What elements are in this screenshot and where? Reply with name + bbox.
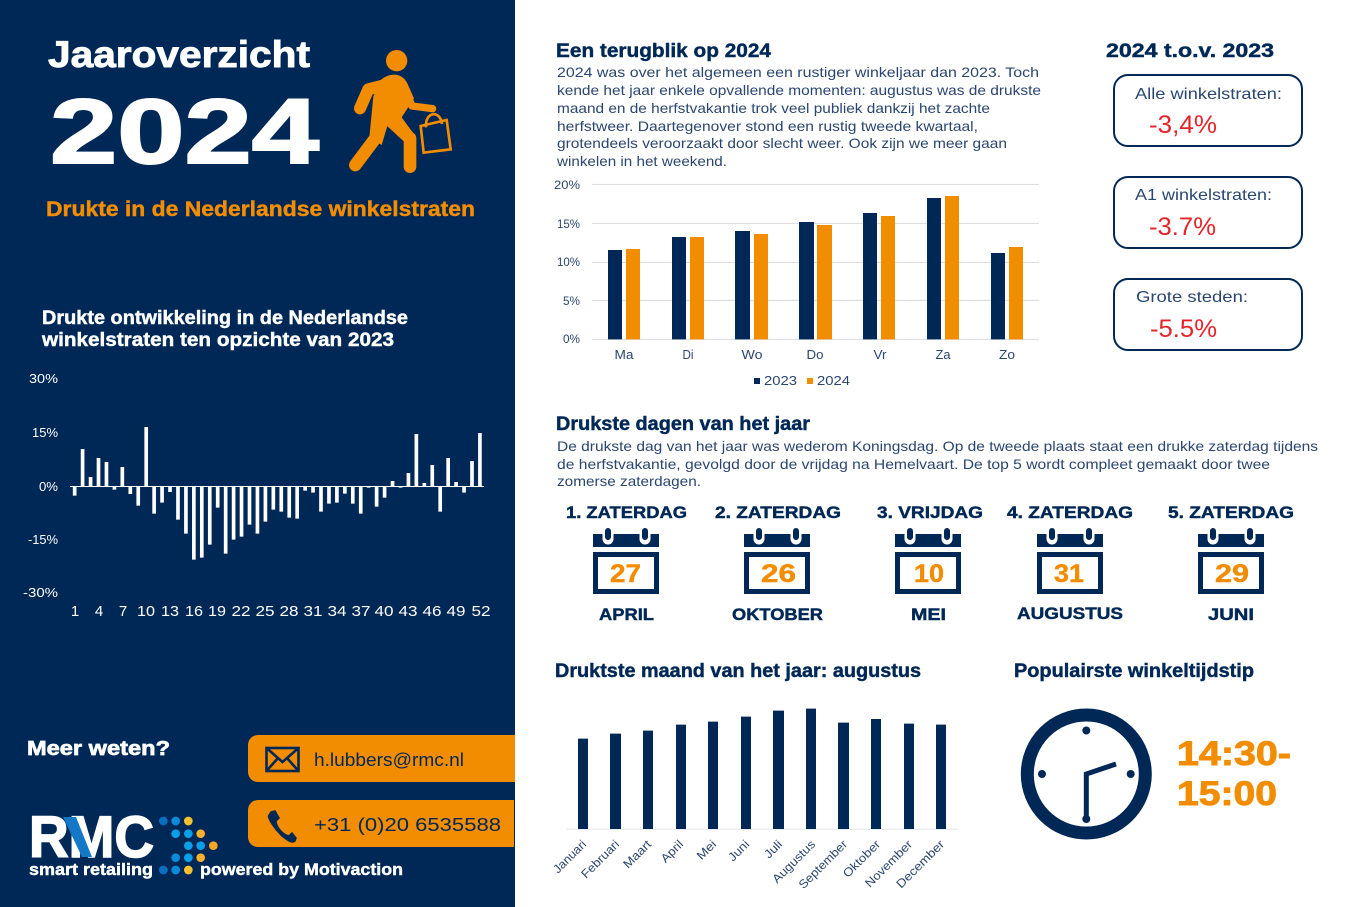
y axis labels: 0% xyxy=(39,479,58,494)
x axis labels: 28 xyxy=(280,603,298,620)
callout: all shopping streets: -3,4% xyxy=(1149,111,1217,139)
x axis labels: 13 xyxy=(161,603,179,620)
x axis labels: 40 xyxy=(374,603,394,620)
icon: clock xyxy=(1027,715,1145,833)
text block: review of 2024: kende het jaar enkele opvallende momenten: augustus was de drukste xyxy=(557,82,1041,98)
callout: A1 shopping streets xyxy=(1114,177,1302,248)
text block: busiest days xyxy=(557,438,1318,489)
y axis labels: 15% xyxy=(557,217,580,231)
y axis labels: 20% xyxy=(554,178,580,192)
calendar: 10 Mei: 10 xyxy=(914,560,944,588)
title xyxy=(48,34,319,183)
panel: left navy background xyxy=(0,0,515,907)
x axis labels: 7 xyxy=(119,603,127,620)
logo: RMC smart retailing xyxy=(29,805,403,879)
logo: RMC smart retailing: smart retailing xyxy=(29,860,153,879)
x axis labels xyxy=(71,603,490,620)
month labels: November xyxy=(862,837,915,890)
heading: weekly development chart: winkelstraten ten opzichte van 2023 xyxy=(41,330,394,351)
text block: review of 2024: maand en de herfstvakantie trok veel publiek dankzij het zachte xyxy=(557,100,990,116)
phone number: +31 (0)20 6535588 xyxy=(314,815,501,835)
y axis labels xyxy=(23,371,58,600)
heading: review of 2024: Een terugblik op 2024 xyxy=(556,41,771,62)
legend: 2024 xyxy=(817,373,850,388)
contact: phone button xyxy=(248,800,514,847)
title: 2024 xyxy=(50,81,319,183)
popular time text: 14:30- xyxy=(1177,735,1291,773)
icon: envelope xyxy=(266,748,298,771)
x axis labels: 37 xyxy=(352,603,370,620)
email address: h.lubbers@rmc.nl xyxy=(314,750,464,770)
heading: weekly development chart: Drukte ontwikkeling in de Nederlandse xyxy=(42,308,408,329)
heading: weekly development chart xyxy=(41,308,408,351)
y axis labels xyxy=(554,178,580,346)
y axis labels: 0% xyxy=(563,332,580,346)
calendar: 29 Juni: JUNI xyxy=(1208,605,1254,624)
contact: email button xyxy=(248,735,515,782)
calendar: 29 Juni: 29 xyxy=(1215,560,1249,588)
bar chart: visits per month xyxy=(550,709,958,892)
callout: A1 shopping streets: A1 winkelstraten: xyxy=(1135,187,1272,204)
bar chart: share of visits per weekday xyxy=(554,178,1039,388)
subtitle: Drukte in de Nederlandse winkelstraten xyxy=(46,198,475,221)
callout: A1 shopping streets: -3.7% xyxy=(1149,213,1216,241)
popular time text: 15:00 xyxy=(1177,775,1277,813)
grid lines and bars xyxy=(592,184,1039,339)
month labels: Maart xyxy=(620,837,655,871)
weekly bars xyxy=(70,427,484,560)
logo: RMC smart retailing: powered by Motivaction xyxy=(200,860,403,879)
text block: busiest days: de herfstvakantie, gevolgd door de vrijdag na Hemelvaart. De top 5 wordt compleet gemaakt door twee xyxy=(557,456,1270,472)
y axis labels: 10% xyxy=(557,255,580,269)
callout: large cities: -5.5% xyxy=(1150,315,1217,343)
y axis labels: -15% xyxy=(28,532,58,547)
month labels: Juni xyxy=(725,837,752,864)
calendar: 27 April: 27 xyxy=(610,560,641,588)
text block: review of 2024: herfstweer. Daartegenover stond een rustig tweede kwartaal, xyxy=(557,118,978,134)
icon: telephone xyxy=(268,811,296,842)
text block: busiest days: zomerse zaterdagen. xyxy=(557,473,701,489)
x axis labels: 25 xyxy=(256,603,274,620)
y axis labels: -30% xyxy=(23,585,58,600)
calendar: 27 April xyxy=(566,503,687,624)
y axis labels: 15% xyxy=(32,425,58,440)
icon: walking shopper with bag xyxy=(355,50,451,167)
popular time text xyxy=(1177,735,1291,813)
text block: busiest days: De drukste dag van het jaar was wederom Koningsdag. Op de tweede plaats staat een drukke zaterdag tijdens xyxy=(557,438,1318,454)
legend: 2023 xyxy=(764,373,797,388)
calendar: 10 Mei: 3. VRIJDAG xyxy=(877,503,983,522)
calendar: 26 Oktober: 2. ZATERDAG xyxy=(715,503,841,522)
calendar: 26 Oktober: 26 xyxy=(761,560,796,588)
x axis labels: Za xyxy=(936,347,951,362)
text block: review of 2024: winkelen in het weekend. xyxy=(556,153,727,169)
text block: review of 2024 xyxy=(556,64,1041,169)
logo: RMC smart retailing: RMC xyxy=(29,805,154,870)
x axis labels: Wo xyxy=(742,347,762,362)
x axis labels xyxy=(614,347,1015,362)
heading: 2024 versus 2023: 2024 t.o.v. 2023 xyxy=(1106,41,1274,62)
calendar: 10 Mei xyxy=(877,503,983,624)
calendar: 31 Augustus xyxy=(1007,503,1133,623)
x axis labels: 1 xyxy=(71,603,79,620)
x axis labels: 16 xyxy=(185,603,203,620)
text block: review of 2024: grotendeels veroorzaakt door slecht weer. Ook zijn we meer gaan xyxy=(557,135,1007,151)
x axis labels: 49 xyxy=(446,603,466,620)
x axis labels: 4 xyxy=(95,603,103,620)
y axis labels: 5% xyxy=(563,294,580,308)
calendar: 31 Augustus: 31 xyxy=(1054,560,1084,588)
calendar: 26 Oktober: OKTOBER xyxy=(732,605,823,624)
x axis labels: Zo xyxy=(999,347,1015,362)
month labels: Oktober xyxy=(840,837,883,880)
month labels xyxy=(550,837,947,892)
heading: busiest days: Drukste dagen van het jaar xyxy=(556,414,811,435)
contact heading: Meer weten? xyxy=(27,738,170,760)
x axis labels: 43 xyxy=(398,603,418,620)
callout: all shopping streets: Alle winkelstraten: xyxy=(1135,86,1282,103)
month labels: December xyxy=(893,837,947,891)
x axis labels: 34 xyxy=(328,603,346,620)
callout: all shopping streets xyxy=(1114,75,1302,146)
calendar: 27 April: APRIL xyxy=(599,605,654,624)
month labels: September xyxy=(796,837,850,892)
callout: large cities xyxy=(1114,279,1302,350)
calendar: 27 April: 1. ZATERDAG xyxy=(566,503,687,522)
x axis labels: 10 xyxy=(137,603,155,620)
logo dots xyxy=(159,817,218,874)
month labels: Februari xyxy=(578,837,622,881)
x axis labels: Di xyxy=(682,347,694,362)
calendar: 10 Mei: MEI xyxy=(911,605,946,624)
x axis labels: 19 xyxy=(208,603,226,620)
calendar: 29 Juni xyxy=(1168,503,1294,624)
x axis labels: Ma xyxy=(614,347,634,362)
month labels: Januari xyxy=(550,837,589,876)
legend xyxy=(754,373,850,388)
month labels: April xyxy=(658,837,686,866)
x axis labels: Do xyxy=(806,347,824,362)
x axis labels: 22 xyxy=(232,603,250,620)
title: Jaaroverzicht xyxy=(48,34,310,75)
x axis labels: Vr xyxy=(874,347,887,362)
callout: large cities: Grote steden: xyxy=(1136,289,1248,306)
month labels: Augustus xyxy=(769,837,818,886)
bar chart: weekly change versus 2023 xyxy=(23,371,490,620)
calendar: 29 Juni: 5. ZATERDAG xyxy=(1168,503,1294,522)
text block: review of 2024: 2024 was over het algemeen een rustiger winkeljaar dan 2023. Toch xyxy=(557,64,1039,80)
x axis labels: 31 xyxy=(304,603,322,620)
y axis labels: 30% xyxy=(29,371,58,386)
calendar: 31 Augustus: 4. ZATERDAG xyxy=(1007,503,1133,522)
x axis labels: 52 xyxy=(472,603,490,620)
month bars xyxy=(566,709,958,830)
month labels: Juli xyxy=(761,837,785,861)
heading: most popular shopping time: Populairste winkeltijdstip xyxy=(1014,661,1254,682)
calendar: 31 Augustus: AUGUSTUS xyxy=(1017,604,1123,623)
x axis labels: 46 xyxy=(422,603,442,620)
calendar: 26 Oktober xyxy=(715,503,841,624)
heading: busiest month: Druktste maand van het jaar: augustus xyxy=(555,661,921,682)
month labels: Mei xyxy=(694,837,719,863)
